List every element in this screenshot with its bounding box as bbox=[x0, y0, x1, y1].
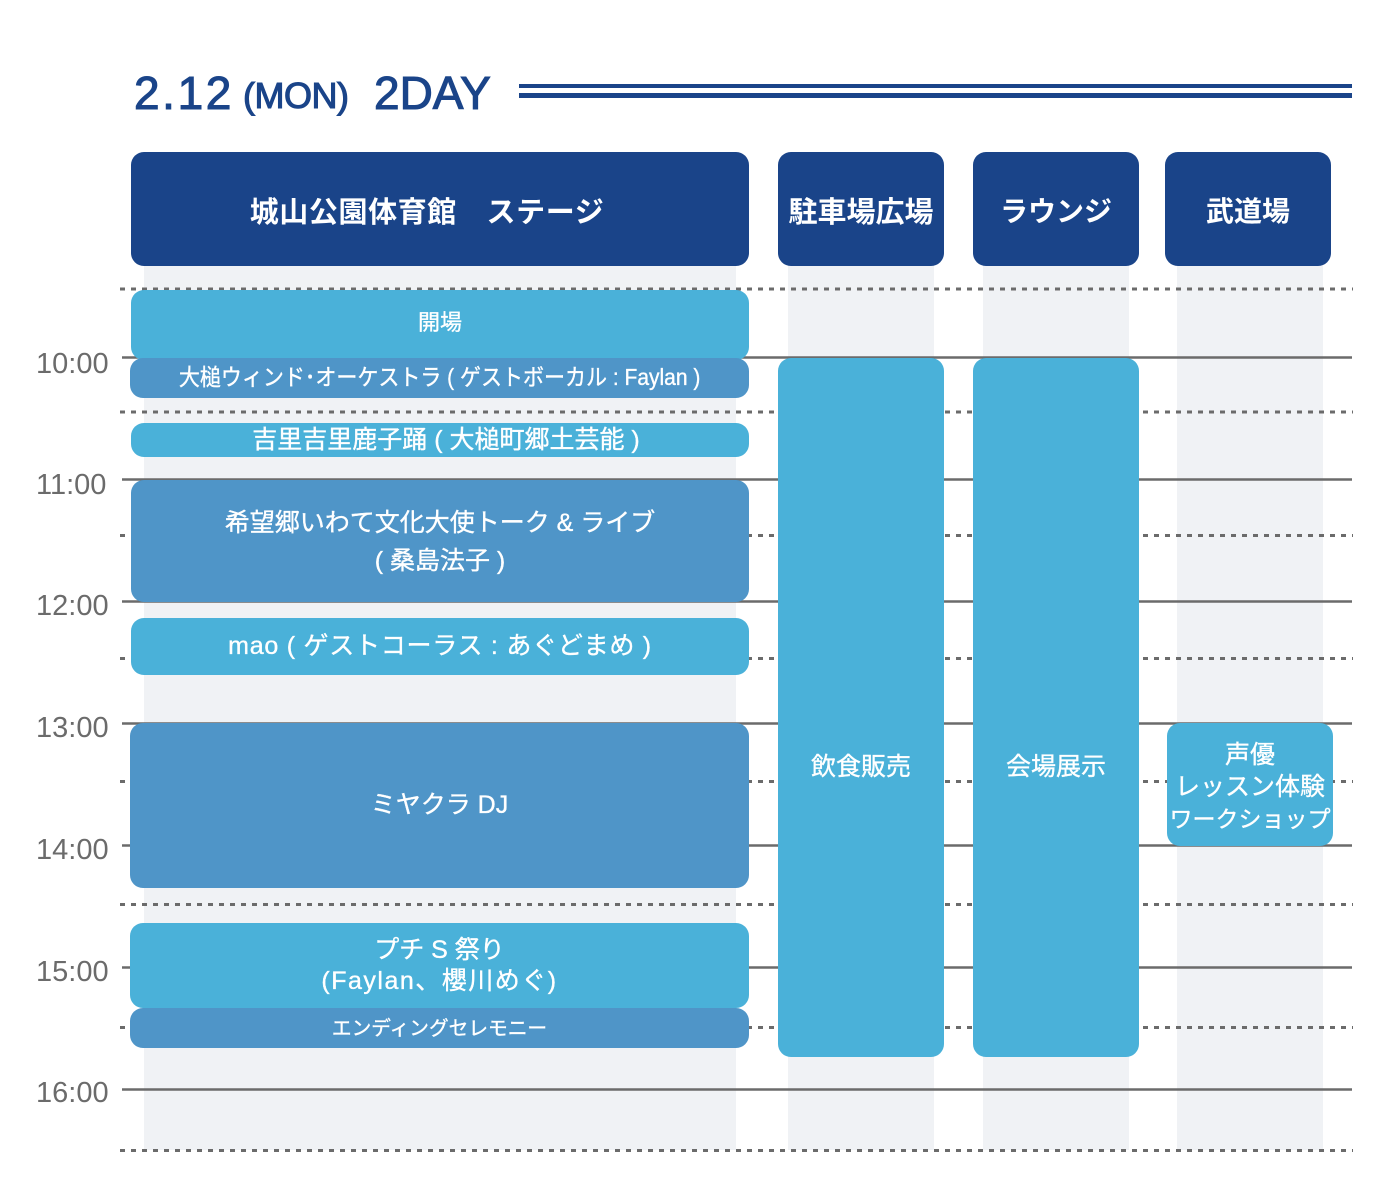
column background: parking plaza bbox=[788, 265, 934, 1150]
time label 16:00: 16:00 bbox=[36, 1077, 109, 1109]
column header: parking plaza: 駐車場広場 bbox=[788, 197, 934, 229]
event: food and drink sales bbox=[778, 358, 944, 1057]
title double rule bbox=[519, 84, 1352, 98]
column header: dojo bbox=[1165, 152, 1331, 266]
title: (MON) bbox=[243, 75, 348, 116]
event: food and drink sales: 飲食販売 bbox=[811, 753, 911, 781]
event: Petit S festival bbox=[130, 923, 749, 1008]
event: culture ambassador talk and live bbox=[131, 480, 749, 602]
time label 14:00: 14:00 bbox=[36, 834, 109, 866]
event: venue exhibition bbox=[973, 358, 1139, 1057]
time label 15:00: 15:00 bbox=[36, 956, 109, 988]
time label 11:00: 11:00 bbox=[36, 469, 106, 501]
event: Miyakura DJ: ミヤクラ DJ bbox=[371, 791, 508, 819]
event: doors open: 開場 bbox=[418, 310, 462, 335]
column background: lounge bbox=[983, 265, 1129, 1150]
column header: lounge: ラウンジ bbox=[1000, 196, 1112, 227]
event: voice actor workshop: ワークショップ bbox=[1170, 806, 1330, 832]
event: culture ambassador talk and live: ( 桑島法子 ) bbox=[375, 547, 505, 575]
title bbox=[134, 67, 491, 119]
title: 2DAY bbox=[374, 67, 491, 119]
column header: dojo: 武道場 bbox=[1206, 196, 1290, 227]
time label 13:00: 13:00 bbox=[36, 712, 109, 744]
event: ending ceremony: エンディングセレモニー bbox=[332, 1018, 547, 1040]
column header: stage: 城山公園体育館 ステージ bbox=[250, 197, 604, 229]
column background: stage bbox=[144, 265, 736, 1150]
column header: stage bbox=[131, 152, 749, 266]
event: shishi odori bbox=[131, 423, 749, 457]
title: 2.12 bbox=[134, 67, 234, 119]
event: voice actor workshop bbox=[1167, 723, 1333, 846]
event: doors open bbox=[131, 290, 749, 360]
event: venue exhibition: 会場展示 bbox=[1006, 753, 1106, 781]
event: mao bbox=[131, 618, 749, 675]
event: wind orchestra: 大槌ウィンド･オーケストラ ( ゲストボーカル : Faylan ) bbox=[179, 364, 700, 390]
column background: dojo bbox=[1177, 265, 1323, 1150]
event: mao: mao ( ゲストコーラス : あぐどまめ ) bbox=[228, 632, 652, 660]
event: Miyakura DJ bbox=[130, 723, 749, 888]
column header: lounge bbox=[973, 152, 1139, 266]
event: voice actor workshop: レッスン体験 bbox=[1175, 772, 1325, 800]
time label 10:00: 10:00 bbox=[36, 348, 109, 380]
event: Petit S festival: プチ S 祭り bbox=[374, 936, 505, 964]
time label 12:00: 12:00 bbox=[36, 590, 109, 622]
column header: parking plaza bbox=[778, 152, 944, 266]
event: shishi odori: 吉里吉里鹿子踊 ( 大槌町郷土芸能 ) bbox=[252, 426, 640, 454]
event: Petit S festival: (Faylan、櫻川めぐ) bbox=[321, 966, 558, 994]
event: voice actor workshop: 声優 bbox=[1225, 740, 1275, 768]
event: ending ceremony bbox=[130, 1008, 749, 1048]
event: wind orchestra bbox=[130, 358, 749, 398]
event: culture ambassador talk and live: 希望郷いわて文化大使トーク & ライブ bbox=[225, 509, 655, 537]
